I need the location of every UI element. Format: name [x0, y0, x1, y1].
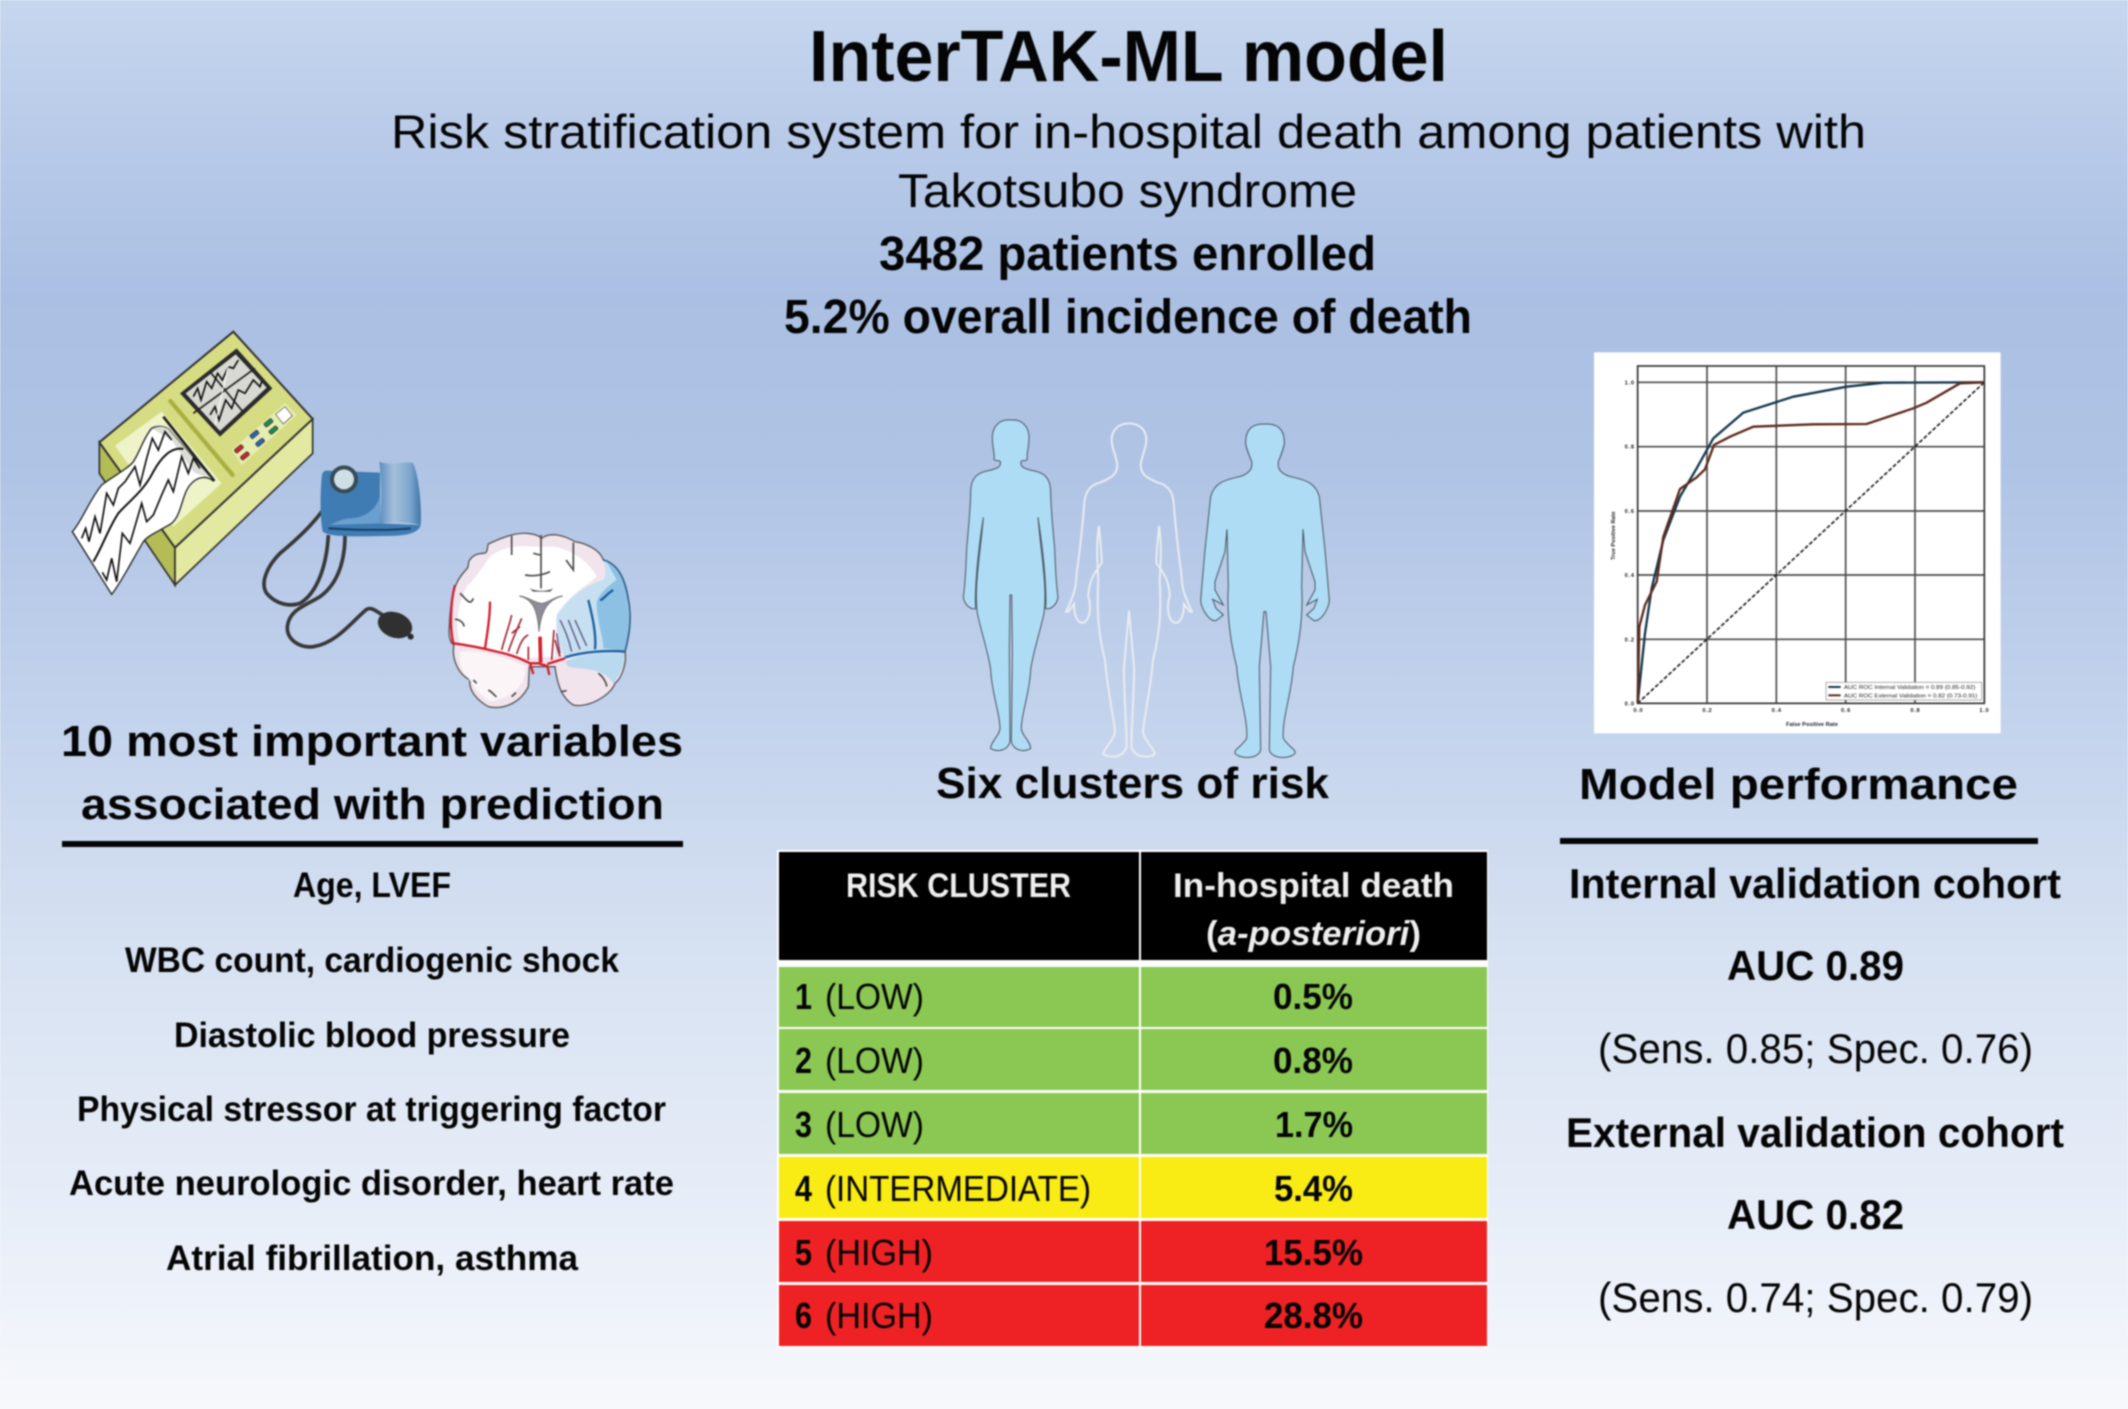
- table: risk clusters: 0.8%: [1273, 1040, 1353, 1081]
- internal validation results: Internal validation cohort: [1569, 860, 2061, 907]
- heading: variables: 10 most important variables: [61, 717, 683, 766]
- icon: outline silhouette: [1066, 423, 1192, 757]
- chart: ROC curve: [1594, 352, 2001, 733]
- icon: male silhouette: [1201, 424, 1329, 757]
- heading: model performance: Model performance: [1579, 760, 2018, 809]
- table: risk clusters: [777, 850, 1488, 1348]
- chart: ROC curve: 0.0: [1633, 708, 1643, 714]
- table: risk clusters: 5: [795, 1232, 812, 1273]
- table: risk clusters: (LOW): [825, 1104, 924, 1145]
- external validation results: External validation cohort: [1566, 1109, 2064, 1156]
- list of variables: Physical stressor at triggering factor: [77, 1090, 666, 1129]
- icon: blood pressure cuff: [264, 462, 421, 647]
- table: risk clusters: In-hospital death: [1173, 867, 1454, 905]
- list of variables: Atrial fibrillation, asthma: [166, 1239, 579, 1278]
- chart: ROC curve: 0.6: [1841, 708, 1850, 714]
- list of variables: [69, 866, 674, 1278]
- list of variables: WBC count, cardiogenic shock: [125, 941, 619, 980]
- table: risk clusters: 6: [795, 1295, 812, 1336]
- chart: ROC curve: 0.2: [1625, 637, 1634, 643]
- external validation results: AUC 0.82: [1727, 1191, 1904, 1238]
- chart: ROC curve: False Positive Rate: [1786, 722, 1838, 728]
- icon: ECG machine: [72, 332, 313, 594]
- subtitle: Takotsubo syndrome: [898, 164, 1357, 217]
- table: risk clusters: 4: [795, 1168, 812, 1209]
- chart: ROC curve: 0.2: [1702, 708, 1712, 714]
- table: risk clusters: 15.5%: [1264, 1232, 1363, 1273]
- table: risk clusters: 1: [795, 976, 812, 1017]
- list of variables: Diastolic blood pressure: [174, 1016, 570, 1055]
- chart: ROC curve: 0.0: [1625, 701, 1634, 707]
- table: risk clusters: (LOW): [825, 1040, 924, 1081]
- table: risk clusters: (INTERMEDIATE): [825, 1168, 1091, 1209]
- external validation results: (Sens. 0.74; Spec. 0.79): [1598, 1274, 2033, 1321]
- enrolment statistics: 5.2% overall incidence of death: [784, 291, 1472, 344]
- external validation results: [1566, 1109, 2064, 1321]
- table: risk clusters: (LOW): [825, 976, 924, 1017]
- chart: ROC curve: 0.8: [1910, 708, 1920, 714]
- list of variables: Acute neurologic disorder, heart rate: [69, 1164, 674, 1203]
- icon: brain section: [449, 533, 630, 707]
- chart: ROC curve: 1.0: [1625, 380, 1634, 386]
- title: InterTAK-ML model: [809, 17, 1448, 97]
- table: risk clusters: 28.8%: [1264, 1295, 1363, 1336]
- table: risk clusters: 5.4%: [1274, 1168, 1353, 1209]
- list of variables: Age, LVEF: [293, 866, 451, 905]
- internal validation results: [1569, 860, 2061, 1072]
- internal validation results: (Sens. 0.85; Spec. 0.76): [1598, 1025, 2033, 1072]
- chart: ROC curve: AUC ROC Internal Validation = 0.89 (0.85-0.92): [1844, 685, 1975, 691]
- chart: ROC curve: 0.4: [1625, 573, 1635, 579]
- icon: female silhouette: [963, 420, 1058, 751]
- table: risk clusters: 0.5%: [1273, 976, 1353, 1017]
- enrolment statistics: 3482 patients enrolled: [879, 228, 1376, 281]
- subtitle: Risk stratification system for in-hospital death among patients with: [391, 105, 1866, 158]
- chart: ROC curve: 0.8: [1625, 445, 1634, 451]
- heading: variables: associated with prediction: [81, 780, 664, 829]
- chart: ROC curve: 0.6: [1625, 509, 1634, 515]
- table: risk clusters: 2: [795, 1040, 812, 1081]
- enrolment statistics: [784, 228, 1472, 344]
- heading: variables: [61, 717, 683, 829]
- table: risk clusters: RISK CLUSTER: [846, 867, 1071, 905]
- chart: ROC curve: 0.4: [1772, 708, 1782, 714]
- internal validation results: AUC 0.89: [1727, 942, 1904, 989]
- table: risk clusters: (HIGH): [825, 1232, 933, 1273]
- chart: ROC curve: 1.0: [1979, 708, 1989, 714]
- table: risk clusters: (HIGH): [825, 1295, 933, 1336]
- table: risk clusters: 3: [795, 1104, 812, 1145]
- chart: ROC curve: True Positive Rate: [1611, 511, 1617, 560]
- subtitle: [391, 105, 1866, 217]
- chart: ROC curve: AUC ROC External Validation = 0.82 (0.73-0.91): [1844, 693, 1977, 699]
- table: risk clusters: 1.7%: [1275, 1104, 1353, 1145]
- table: risk clusters: (a-posteriori): [1206, 915, 1421, 953]
- icon: body silhouettes: [963, 420, 1329, 757]
- heading: six clusters: Six clusters of risk: [936, 759, 1330, 808]
